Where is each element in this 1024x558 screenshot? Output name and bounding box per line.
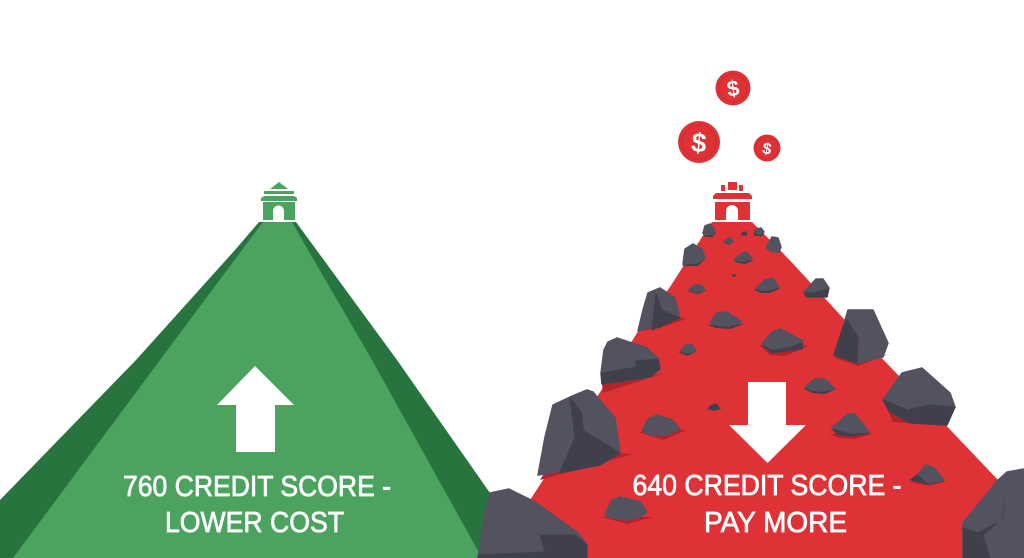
label: 760 credit score xyxy=(123,471,391,539)
coin: right: $ xyxy=(761,140,773,159)
rock: bottom right xyxy=(963,469,1024,558)
label: 640 credit score: PAY MORE xyxy=(704,507,847,539)
rock: left xyxy=(601,338,668,393)
icon: green bank gate xyxy=(261,182,297,220)
icon: red bank gate xyxy=(713,182,752,220)
green path light surface xyxy=(13,222,482,558)
coin: top: $ xyxy=(725,75,741,102)
red path surface xyxy=(490,222,1024,558)
rock: large left xyxy=(538,390,633,480)
label: 640 credit score xyxy=(632,470,902,539)
icon: white down arrow xyxy=(729,382,806,463)
label: 760 credit score: 760 CREDIT SCORE - xyxy=(123,471,391,503)
rock: right large xyxy=(883,368,955,426)
panel: red rocky path xyxy=(478,70,1024,558)
coin: left: $ xyxy=(690,127,708,159)
icon: dollar coins xyxy=(678,70,780,163)
label: 760 credit score: LOWER COST xyxy=(165,507,344,539)
label: 640 credit score: 640 CREDIT SCORE - xyxy=(632,470,902,502)
panel: green smooth path xyxy=(0,182,500,558)
rock: right tall xyxy=(833,310,889,366)
small rocks on the path xyxy=(602,224,946,524)
rock: upper left xyxy=(682,244,706,266)
rock: mid left xyxy=(638,288,686,331)
rock: upper right xyxy=(766,237,781,252)
green path dark edges xyxy=(0,222,500,558)
rock: mid right small xyxy=(804,279,829,297)
icon: white up arrow xyxy=(217,366,294,452)
rock: bottom left xyxy=(478,489,587,558)
